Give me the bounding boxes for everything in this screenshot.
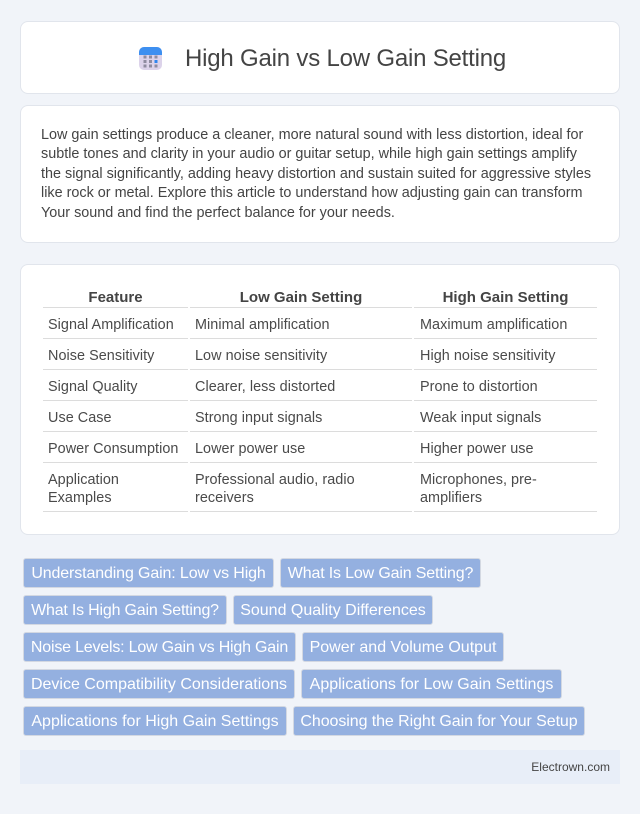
title: High Gain vs Low Gain Setting: [185, 45, 506, 72]
comparison table: Low noise sensitivity: [195, 348, 327, 364]
intro paragraph: Your sound and find the perfect balance for your needs.: [41, 205, 395, 221]
comparison table: Higher power use: [420, 441, 534, 457]
comparison table: Weak input signals: [420, 410, 541, 426]
comparison table: receivers: [195, 490, 254, 506]
tag: what is low gain: [280, 558, 481, 588]
comparison table: Minimal amplification: [195, 317, 330, 333]
comparison table: Use Case: [48, 410, 112, 426]
intro paragraph: the signal significantly, adding heavy distortion and sustain suited for aggressive styles: [41, 166, 591, 182]
footer brand: Electrown.com: [531, 760, 610, 774]
comparison table: Lower power use: [195, 441, 305, 457]
tag: understanding gain: Understanding Gain: Low vs High: [31, 565, 266, 582]
tag: what is high gain: What Is High Gain Setting?: [31, 602, 219, 619]
tag: sound quality: Sound Quality Differences: [240, 602, 426, 619]
tag: noise levels: [23, 632, 296, 662]
comparison table: Signal Amplification: [48, 317, 174, 333]
comparison table: Maximum amplification: [420, 317, 567, 333]
tag: what is high gain: [23, 595, 227, 625]
header card: [20, 21, 620, 94]
comparison table: Examples: [48, 490, 112, 506]
tag: applications low: [301, 669, 562, 699]
tag: power and volume: Power and Volume Output: [310, 639, 496, 656]
comparison table: High Gain Setting: [443, 289, 568, 306]
icon: calendar: [139, 47, 162, 70]
footer: [20, 750, 620, 784]
tag: choosing gain: Choosing the Right Gain for Your Setup: [300, 713, 578, 730]
table card: [20, 264, 620, 535]
intro card: [20, 105, 620, 243]
comparison table: Feature: [88, 289, 143, 306]
comparison table: High noise sensitivity: [420, 348, 555, 364]
tag: choosing gain: [293, 706, 585, 736]
tag: noise levels: Noise Levels: Low Gain vs High Gain: [31, 639, 288, 656]
comparison table: amplifiers: [420, 490, 482, 506]
comparison table: Signal Quality: [48, 379, 138, 395]
tag: power and volume: [302, 632, 504, 662]
tag: applications high: [23, 706, 287, 736]
intro paragraph: like rock or metal. Explore this article to understand how adjusting gain can transform: [41, 185, 583, 201]
intro paragraph: subtle tones and clarity in your audio or guitar setup, while high gain settings amplify: [41, 146, 577, 162]
comparison table: Strong input signals: [195, 410, 322, 426]
tag: what is low gain: What Is Low Gain Setting?: [288, 565, 473, 582]
comparison table: Prone to distortion: [420, 379, 538, 395]
comparison table: Professional audio, radio: [195, 472, 355, 488]
tag: applications low: Applications for Low Gain Settings: [310, 676, 553, 693]
tag: device compatibility: [23, 669, 295, 699]
comparison table: Power Consumption: [48, 441, 178, 457]
tag: sound quality: [233, 595, 433, 625]
intro paragraph: Low gain settings produce a cleaner, more natural sound with less distortion, ideal for: [41, 127, 583, 143]
tag: understanding gain: [23, 558, 274, 588]
tag: device compatibility: Device Compatibility Considerations: [31, 676, 287, 693]
comparison table: Microphones, pre-: [420, 472, 537, 488]
topic tags: [23, 558, 585, 736]
comparison table: Application: [48, 472, 119, 488]
comparison table: [43, 289, 597, 512]
tag: applications high: Applications for High Gain Settings: [31, 713, 279, 730]
comparison table: Noise Sensitivity: [48, 348, 154, 364]
intro paragraph: [41, 127, 591, 221]
comparison table: Low Gain Setting: [240, 289, 362, 306]
comparison table: Clearer, less distorted: [195, 379, 335, 395]
